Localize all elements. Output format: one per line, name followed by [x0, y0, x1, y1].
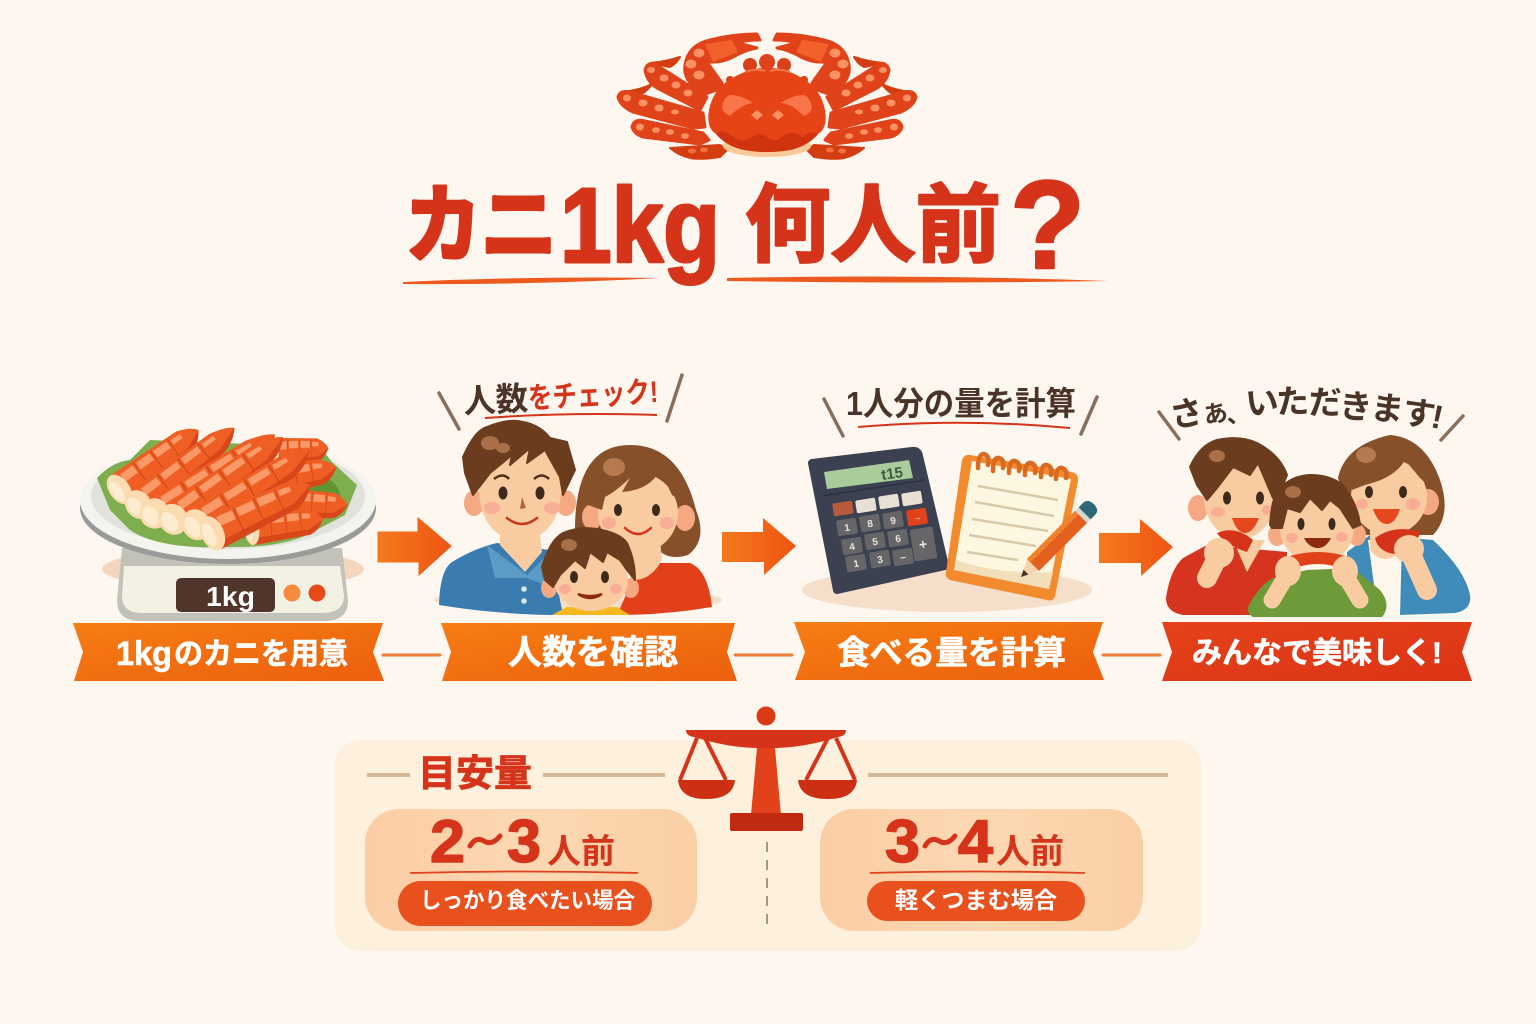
man [439, 421, 576, 615]
title: ? [1010, 156, 1085, 295]
icon: calculator: 4 [849, 542, 856, 553]
label: step 3 ribbon [794, 622, 1104, 680]
icon: calculator: 1 [853, 559, 860, 570]
step 3: heading: 1人分の量を計算 [846, 385, 1076, 422]
arrow: step 3 to 4 [1099, 519, 1173, 576]
label: step 3 ribbon: 食べる量を計算 [837, 634, 1066, 671]
card: hearty eaters [365, 808, 697, 931]
title [403, 156, 1108, 295]
woman [575, 445, 712, 615]
icon: calculator: 6 [895, 534, 902, 545]
step 4: heading: さ [1167, 392, 1207, 435]
icon: calculator: 8 [867, 519, 874, 530]
card: hearty eaters: 2 [430, 808, 465, 875]
step 2: family illustration [434, 421, 722, 615]
scale readout: 1kg [206, 581, 255, 612]
card: light eaters: 人前 [996, 833, 1064, 871]
step 4: heading: す [1400, 393, 1438, 434]
child [1248, 475, 1387, 617]
step 4: heading: い [1244, 383, 1280, 422]
card: light eaters: 4 [958, 808, 994, 875]
panel: guideline amounts [335, 706, 1201, 951]
icon: calculator: 1 [844, 523, 851, 534]
card: hearty eaters: 3 [507, 808, 541, 875]
icon: calculator [812, 451, 945, 590]
step 4: heading: ! [1428, 398, 1447, 436]
label: step 4 ribbon: みんなで美味しく! [1192, 637, 1442, 670]
woman [1338, 435, 1470, 615]
card: hearty eaters: しっかり食べたい場合 [420, 888, 635, 913]
label: step 2 ribbon: 人数を確認 [508, 634, 678, 672]
title: カニ [405, 179, 557, 274]
title: 何人前 [745, 179, 1001, 274]
icon: crab [618, 34, 916, 159]
step 2: heading: 人数 [462, 380, 529, 420]
arrow: step 1 to 2 [378, 518, 451, 575]
arrow: step 2 to 3 [722, 518, 796, 575]
connector dashes [383, 654, 1160, 656]
heading: guideline: 目安量 [418, 753, 532, 794]
man [1166, 438, 1287, 615]
card: hearty eaters: 人前 [547, 833, 615, 871]
icon: notepad [946, 454, 1100, 600]
label: step 4 ribbon [1162, 622, 1472, 681]
step 3: heading [824, 385, 1097, 436]
icon: calculator: − [899, 553, 907, 564]
label: step 1 ribbon: 1kg [116, 635, 172, 673]
label: step 2 ribbon [441, 623, 737, 681]
step 4: heading: ま [1369, 388, 1406, 429]
icon: calculator: 5 [872, 537, 879, 548]
icon: balance scale [678, 706, 857, 831]
icon: calculator: + [918, 535, 928, 553]
child [541, 528, 639, 615]
icon: calculator: 3 [877, 555, 884, 566]
card: light eaters: 3 [885, 808, 920, 875]
step 4: heading: あ [1202, 399, 1230, 430]
step 4: heading: だ [1308, 384, 1342, 421]
step 2: heading [462, 373, 659, 420]
title: 1kg [560, 167, 720, 285]
icon: pencil [1015, 498, 1100, 583]
step 1: crab on scale illustration [80, 418, 376, 621]
icon: calculator: 9 [890, 516, 897, 527]
icon: calculator: t15 [880, 464, 904, 484]
step 4: heading [1159, 382, 1463, 440]
step 4: heading: 、 [1225, 400, 1252, 429]
icon: calculator: → [912, 512, 922, 523]
card: light eaters: 軽くつまむ場合 [895, 887, 1057, 913]
step 3: calculator and notepad [802, 451, 1100, 612]
label: step 1 ribbon [73, 623, 384, 681]
step 2: heading: をチェック! [527, 376, 659, 416]
step 4: heading: た [1275, 382, 1310, 421]
step 4: heading: き [1338, 387, 1374, 426]
label: step 1 ribbon: のカニを用意 [174, 638, 348, 671]
step 4: family eating crab [1166, 435, 1470, 617]
scale readout [176, 578, 275, 612]
card: light eaters [820, 808, 1143, 931]
